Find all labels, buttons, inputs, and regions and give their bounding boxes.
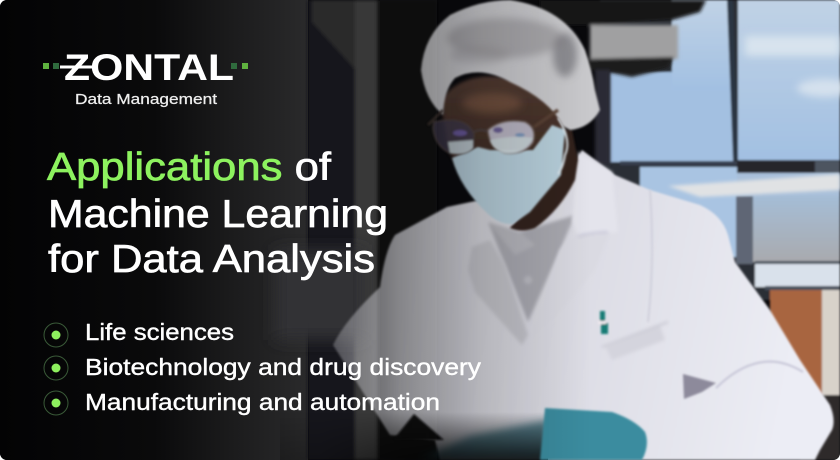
trouser gap xyxy=(393,414,444,440)
left lapel xyxy=(468,240,528,345)
hair net texture xyxy=(447,18,577,77)
logo left squares xyxy=(43,63,59,69)
title line 1: Applications of xyxy=(47,146,331,189)
dark left wall xyxy=(0,0,308,460)
logo subtitle: Data Management xyxy=(75,91,218,108)
logo Z crossbar xyxy=(60,66,94,68)
logo right squares xyxy=(231,63,248,69)
bullet 1 xyxy=(44,322,234,348)
bottom shadow xyxy=(280,412,548,460)
pocket xyxy=(602,322,668,360)
bullet 2: Biotechnology and drug discovery xyxy=(85,354,482,380)
forehead highlight xyxy=(462,93,522,113)
blue glove smear xyxy=(420,420,548,460)
surgical mask xyxy=(452,118,567,224)
hair net cap xyxy=(421,0,600,130)
title xyxy=(47,146,388,281)
scientist figure xyxy=(280,0,834,460)
logo xyxy=(43,54,248,108)
face xyxy=(441,74,567,159)
bullet list xyxy=(44,319,482,415)
sleeve fold xyxy=(648,190,803,399)
blue glove xyxy=(540,408,647,460)
neck xyxy=(510,130,578,230)
dark ceiling beam xyxy=(540,0,706,165)
shirt xyxy=(488,215,575,322)
window panes xyxy=(600,0,840,460)
glasses xyxy=(428,110,558,154)
bullet 1: Life sciences xyxy=(85,319,234,345)
logo wordmark: ZONTAL xyxy=(64,47,234,88)
title line 2: Machine Learning xyxy=(48,193,388,236)
right lapel xyxy=(557,150,615,258)
pen in pocket xyxy=(598,311,608,334)
lower grey backdrop xyxy=(275,250,365,340)
title line 3: for Data Analysis xyxy=(48,238,375,281)
lab coat xyxy=(333,150,834,460)
bullet 3: Manufacturing and automation xyxy=(85,389,440,415)
